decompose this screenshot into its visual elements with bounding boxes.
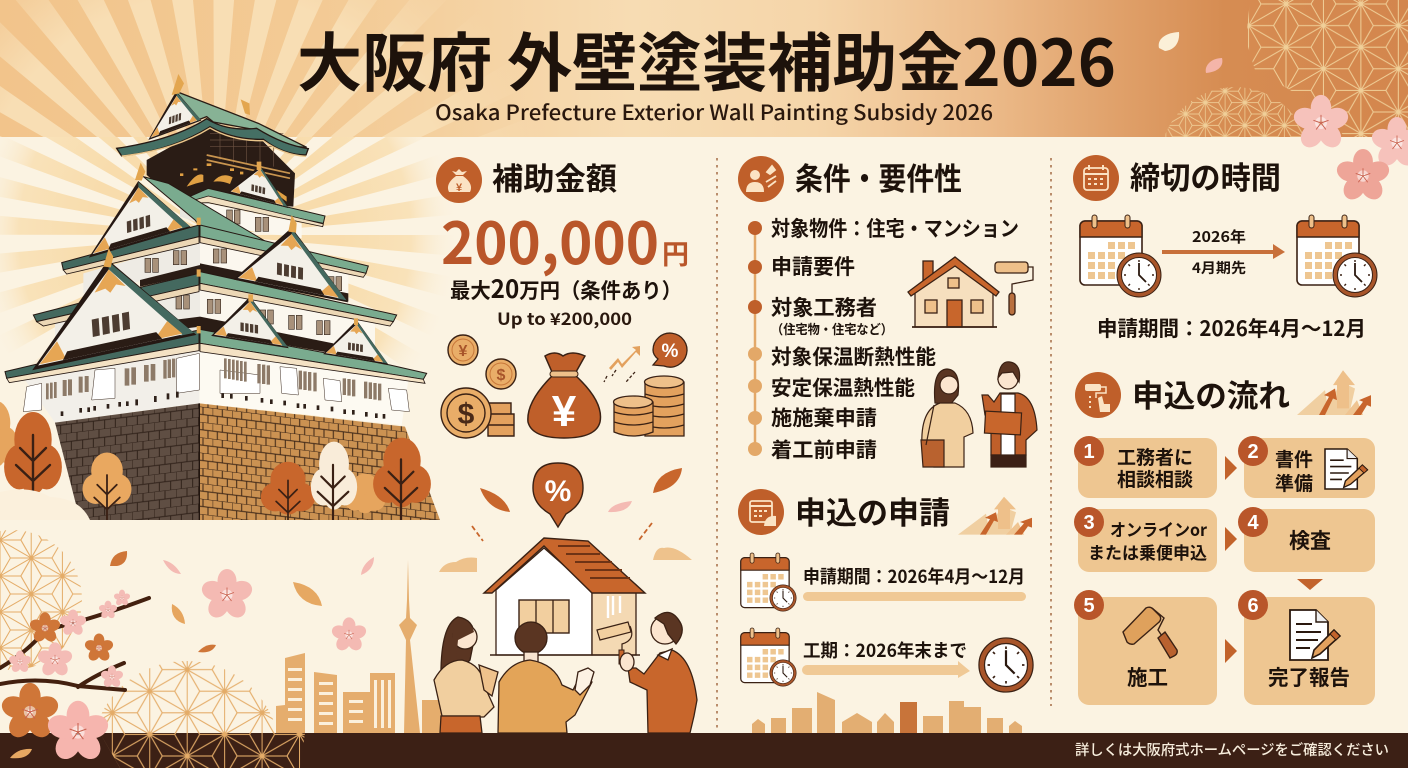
castle third tier bbox=[62, 166, 368, 302]
step 2: 準備 bbox=[1275, 469, 1313, 496]
woman with clipboard bbox=[434, 617, 498, 733]
icon: coins left bbox=[441, 335, 516, 438]
step 6: 完了報告 bbox=[1268, 662, 1350, 692]
step 5 bbox=[1074, 590, 1217, 705]
period row: 申請期間：2026年4月〜12月 bbox=[803, 563, 1025, 589]
icon: coin stacks and percent: % bbox=[662, 341, 679, 362]
conditions list: 対象保温断熱性能 bbox=[771, 340, 937, 370]
step 6: 6 bbox=[1247, 595, 1259, 617]
heading: 締切の時間 bbox=[1130, 153, 1281, 198]
title: 大阪府 外壁塗装補助金2026 bbox=[297, 13, 1116, 105]
bottom footer band bbox=[0, 733, 1408, 768]
end calendar bbox=[1297, 215, 1377, 297]
subtitle: Osaka Prefecture Exterior Wall Painting Subsidy 2026 bbox=[435, 97, 993, 127]
application period: 申請期間：2026年4月〜12月 bbox=[1097, 313, 1366, 343]
amount unit: 円 bbox=[662, 233, 689, 272]
icon: coins left: $ bbox=[458, 398, 475, 431]
icon: yen money bag bbox=[528, 353, 600, 438]
icon: house and roller bbox=[908, 257, 1033, 327]
conditions list: 対象工務者 bbox=[771, 292, 877, 322]
house with percent bubble bbox=[484, 463, 645, 664]
icon: rising arrows bbox=[958, 497, 1032, 535]
arrow with date: 2026年 bbox=[1192, 226, 1246, 247]
percent bubble bbox=[533, 463, 583, 527]
people looking at the house bbox=[434, 612, 697, 733]
step 3: 3 bbox=[1083, 512, 1095, 534]
arrow bbox=[1225, 456, 1237, 480]
step 4: 4 bbox=[1247, 512, 1259, 534]
step 5: 施工 bbox=[1127, 662, 1168, 692]
heading: 申込の流れ bbox=[1132, 371, 1290, 416]
arrow with date bbox=[1162, 226, 1285, 278]
icon: couple consulting bbox=[921, 362, 1037, 467]
panel: application flow bbox=[1074, 370, 1375, 705]
arrow bbox=[1225, 639, 1237, 663]
conditions list: （住宅物・住宅など） bbox=[771, 319, 893, 338]
castle second tier bbox=[33, 216, 397, 357]
small skyline bbox=[752, 692, 1022, 733]
step 1: 1 bbox=[1083, 441, 1095, 463]
step 4 bbox=[1238, 507, 1375, 572]
castle base floor bbox=[5, 162, 427, 425]
conditions list bbox=[771, 213, 1019, 463]
period row bbox=[741, 553, 1026, 611]
step 2 bbox=[1238, 436, 1375, 498]
start calendar bbox=[1080, 215, 1161, 297]
heading: 条件・要件性 bbox=[795, 154, 962, 199]
conditions list: 施施棄申請 bbox=[771, 401, 877, 431]
autumn trees around castle bbox=[0, 401, 431, 529]
asanoha pattern left bbox=[0, 530, 85, 675]
castle fourth tier bbox=[180, 157, 325, 238]
panel: conditions bbox=[738, 154, 1037, 467]
arrow bbox=[1225, 527, 1237, 551]
panel: deadline bbox=[1073, 153, 1377, 343]
step 1: 工務者に bbox=[1117, 443, 1193, 470]
icon: calendar bbox=[1073, 155, 1119, 201]
arrow with date: 4月期先 bbox=[1192, 258, 1246, 278]
icon: person with checklist bbox=[738, 156, 784, 202]
step 4: 検査 bbox=[1289, 525, 1331, 555]
construction row bbox=[741, 628, 1033, 692]
construction row: 工期：2026年末まで bbox=[803, 637, 967, 663]
amount: 200,000 bbox=[441, 197, 659, 281]
asanoha pattern lower bbox=[102, 661, 274, 733]
step 1: 相談相談 bbox=[1117, 465, 1193, 492]
man with roller bbox=[620, 612, 697, 733]
header band bbox=[0, 0, 1408, 137]
heading: 補助金額 bbox=[492, 154, 617, 199]
cherry branch and blossoms bbox=[0, 590, 149, 764]
step 3: オンラインor bbox=[1110, 516, 1208, 541]
icon: rising arrows bbox=[1297, 370, 1371, 415]
castle top tier bbox=[117, 74, 308, 207]
icon: money bag: ¥ bbox=[456, 182, 463, 194]
man seen from behind bbox=[498, 622, 594, 733]
percent bubble: % bbox=[545, 475, 571, 508]
skyline with tower bbox=[276, 560, 441, 733]
conditions list: 申請要件 bbox=[771, 251, 855, 281]
icon: hand with roller bbox=[1075, 372, 1121, 418]
icon: coin stacks and percent bbox=[604, 333, 687, 436]
stone base bbox=[55, 403, 440, 520]
max amount note: 最大20万円（条件あり） bbox=[450, 270, 682, 306]
step 1 bbox=[1074, 436, 1217, 498]
icon: coins left: $ bbox=[497, 367, 506, 384]
english amount note: Up to ¥200,000 bbox=[497, 306, 632, 330]
dotted column dividers bbox=[717, 158, 1051, 728]
conditions list: 着工前申請 bbox=[771, 433, 877, 463]
conditions list: 対象物件：住宅・マンション bbox=[771, 213, 1019, 243]
heading: 申込の申請 bbox=[795, 488, 950, 533]
step 3: または乗便申込 bbox=[1088, 539, 1207, 564]
panel: subsidy amount bbox=[436, 154, 689, 438]
illustration: Osaka castle bbox=[5, 74, 440, 520]
step 5: 5 bbox=[1083, 595, 1095, 617]
icon: calendar badge bbox=[738, 489, 784, 535]
step 2: 2 bbox=[1247, 441, 1259, 463]
header cherry blossoms bbox=[1291, 95, 1408, 204]
icon: yen money bag: ¥ bbox=[552, 387, 577, 436]
arrow down bbox=[1297, 579, 1323, 590]
sunburst rays behind castle bbox=[65, 85, 365, 385]
footer note: 詳しくは大阪府式ホームページをご確認ください bbox=[1075, 739, 1389, 760]
step 6 bbox=[1238, 590, 1375, 705]
icon: money bag bbox=[436, 157, 482, 203]
icon: coins left: ¥ bbox=[459, 343, 468, 360]
step 3 bbox=[1074, 507, 1217, 572]
conditions timeline bbox=[748, 221, 762, 456]
panel: application bbox=[738, 488, 1033, 733]
conditions list: 安定保温熱性能 bbox=[771, 371, 916, 401]
floating blossoms, petals and leaves bbox=[10, 468, 692, 758]
step 2: 書件 bbox=[1275, 445, 1313, 472]
